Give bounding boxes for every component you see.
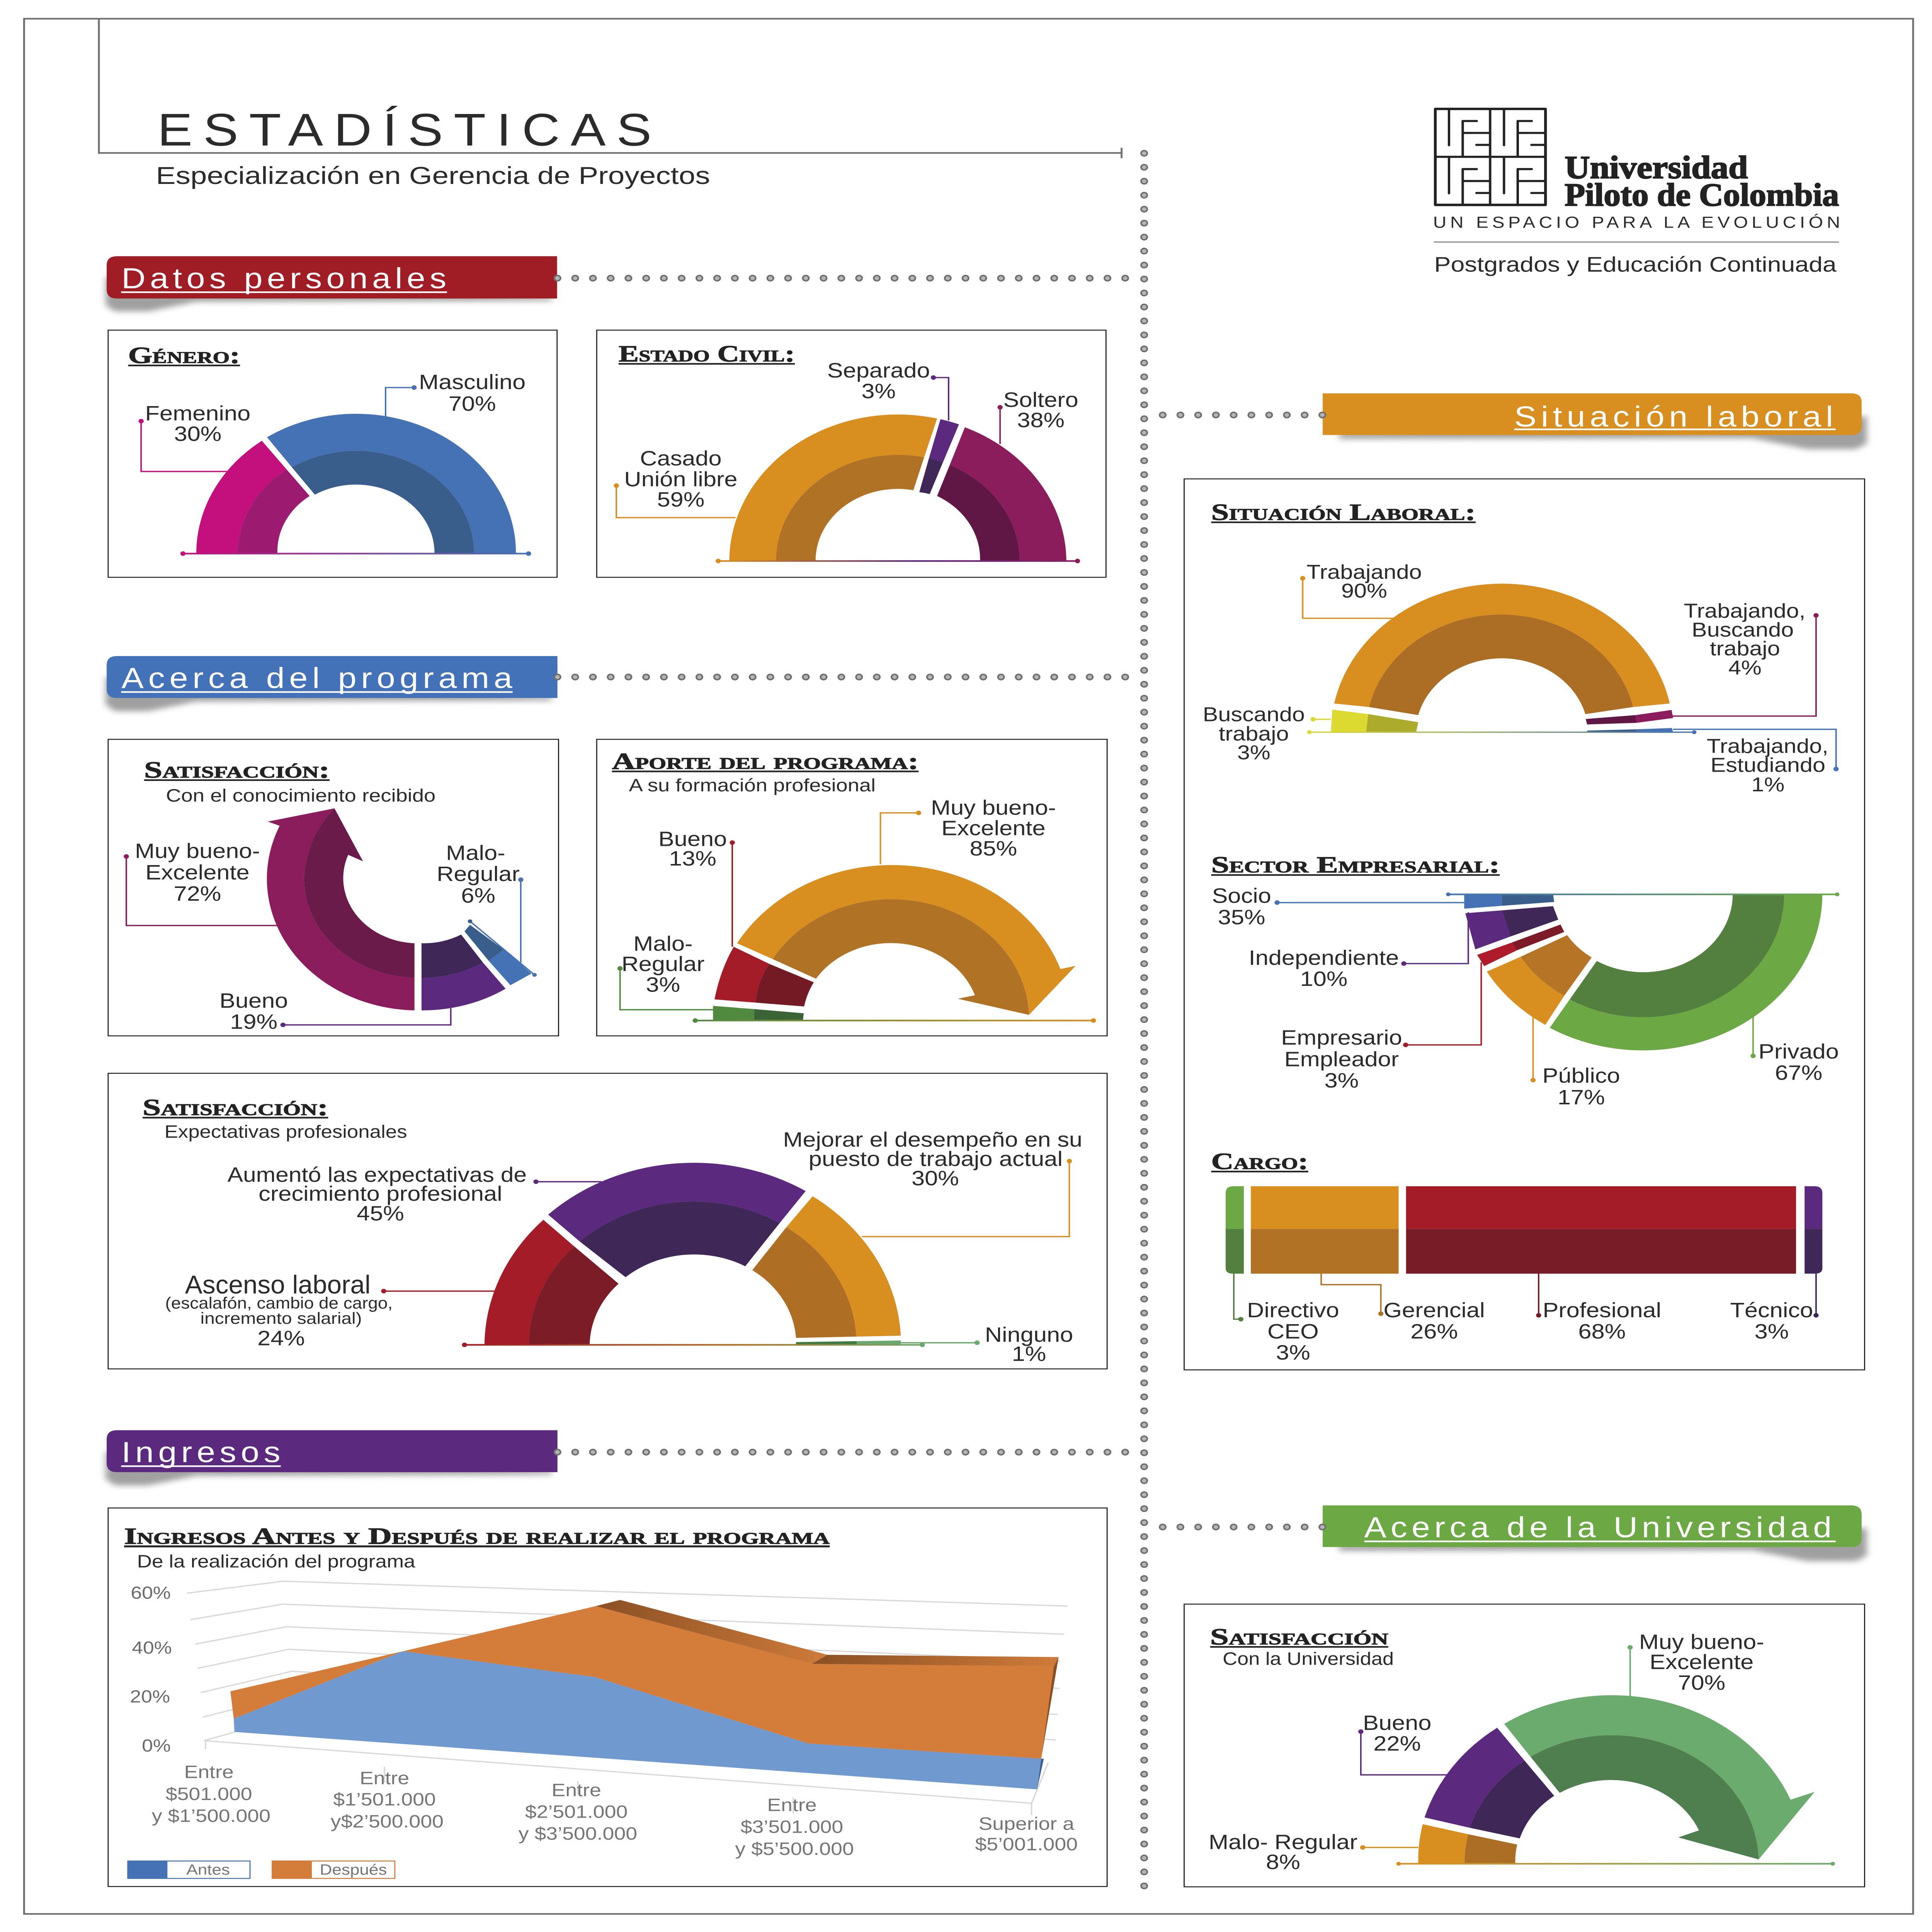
section header: Situación laboral [1163,393,1867,449]
panel: ingresos [108,1508,1107,1886]
section header: Ingresos [105,1430,1128,1485]
label: malo regular [437,842,537,977]
logo department: Postgrados y Educación Continuada [1434,252,1837,276]
x axis label 3: Entre [551,1780,601,1800]
section header: Acerca de la Universidad: Acerca de la Universidad [1364,1512,1832,1544]
legend: antes: Antes [186,1861,230,1878]
heading: situacion laboral: Situación Laboral: [1211,499,1476,525]
label: soltero: Soltero [1003,389,1078,412]
label: masculino: 70% [449,393,496,415]
label: socio: Socio [1212,884,1271,908]
label: trabajando: Trabajando [1306,561,1422,583]
label: ascenso laboral [165,1270,495,1350]
panel: genero [108,330,557,577]
panel: aporte del programa [597,739,1107,1036]
x axis label 2 [331,1768,444,1832]
label: separado: Separado [827,359,930,382]
label: ascenso laboral: 24% [257,1327,305,1350]
label: casado [614,447,737,518]
panel: satisfaccion expectativas [108,1073,1107,1369]
subheading: expectativas: Expectativas profesionales [165,1122,407,1142]
label: casado: Unión libre [624,468,737,491]
y axis labels: 20% [130,1687,170,1706]
donut chart: estado civil [716,415,1080,563]
label: empresario empleador: Empleador [1284,1048,1399,1071]
label: casado: Casado [640,447,722,470]
heading: aporte: Aporte del programa: [612,748,918,774]
label: socio: 35% [1218,906,1265,929]
label: empresario empleador: 3% [1325,1069,1359,1092]
panel: satisfaccion universidad [1184,1604,1865,1887]
logo wordmark line 2: Piloto de Colombia [1565,177,1839,213]
label: ascenso laboral: (escalafón, cambio de cargo, [165,1294,393,1312]
label: directivo: 3% [1276,1341,1310,1364]
label: mejorar desempeno: Mejorar el desempeño en su [783,1128,1082,1151]
donut chart: expectativas [462,1163,925,1347]
label: directivo: CEO [1267,1320,1319,1343]
label: trabajando buscando trabajo: 4% [1728,656,1762,679]
x axis label 4: y $5’500.000 [735,1838,854,1859]
x axis label 3: $2’501.000 [525,1801,628,1822]
label: masculino [386,371,526,417]
label: directivo [1234,1274,1339,1364]
x axis label 4: Entre [767,1794,817,1815]
x axis label 4: $3’501.000 [741,1816,843,1837]
label: buscando trabajo: 3% [1237,742,1270,764]
x axis label 2: y$2’500.000 [331,1811,444,1832]
label: malo regular: 3% [646,973,680,996]
title: ESTADÍSTICAS [157,104,651,156]
label: bueno: 19% [230,1010,277,1034]
section header: Datos personales [105,256,1128,311]
label: separado: 3% [861,380,896,403]
label: tecnico: 3% [1755,1320,1789,1343]
label: ascenso laboral: Ascenso laboral [185,1270,371,1299]
label: femenino [139,402,250,471]
label: malo regular: Regular [621,953,704,976]
section header: Datos personales: Datos personales [121,262,446,295]
label: privado [1750,1017,1839,1084]
subheading: ingresos: De la realización del programa [137,1551,415,1571]
subheading: conocimiento: Con el conocimiento recibido [166,786,435,806]
label: bueno: Bueno [219,990,288,1012]
arrow donut chart: universidad [1396,1695,1835,1866]
label: bueno: 13% [669,847,716,870]
legend: despues [272,1861,395,1879]
x axis label 3: y $3’500.000 [519,1823,637,1844]
label: publico: 17% [1558,1086,1605,1109]
logo wordmark: Universidad [1565,150,1748,185]
label: aumento expectativas: 45% [357,1202,404,1225]
label: mejorar desempeno: puesto de trabajo actual [809,1148,1063,1170]
label: trabajando buscando trabajo: Trabajando, [1684,600,1805,622]
label: malo regular [1209,1831,1418,1874]
label: casado: 59% [657,488,704,511]
3D area chart [187,1581,1068,1815]
label: malo regular [617,932,713,1010]
label: muy bueno [1628,1631,1764,1696]
label: soltero: 38% [1017,409,1065,432]
label: malo regular: Regular [437,863,520,886]
panel: satisfaccion conocimiento [108,739,559,1036]
label: aumento expectativas [228,1163,602,1225]
panel: estado civil [597,330,1106,577]
subtitle: Especialización en Gerencia de Proyectos [156,162,710,189]
label: trabajando estudiando: 1% [1751,773,1784,796]
heading: satisfaccion: Satisfacción: [143,1094,328,1120]
logo [1433,109,1840,276]
x axis label 5 [975,1813,1078,1854]
subheading: aporte: A su formación profesional [629,776,876,795]
x axis label 2: $1’501.000 [333,1789,436,1810]
donut chart: genero [180,414,531,556]
heading: ingresos: Ingresos Antes y Después de realizar el programa [124,1523,830,1549]
label: muy bueno [881,796,1056,864]
donut chart: situacion laboral [1307,584,1696,734]
arrow donut chart: conocimiento [267,808,532,1010]
label: tecnico [1730,1274,1819,1343]
label: empresario empleador: Empresario [1281,1026,1402,1049]
label: femenino: 30% [174,422,221,446]
label: independiente [1249,912,1468,990]
y axis labels [130,1583,172,1755]
label: trabajando estudiando: Estudiando [1711,754,1825,776]
x axis label 1: $501.000 [166,1784,252,1804]
y axis labels: 60% [131,1583,171,1603]
label: buscando trabajo: Buscando [1203,703,1305,726]
label: gerencial: Gerencial [1383,1299,1485,1322]
label: trabajando: 90% [1341,580,1387,602]
label: empresario empleador [1281,962,1481,1092]
donut chart: sector empresarial [1446,893,1839,1050]
x axis label 3 [519,1780,637,1844]
stacked bar: cargo [1226,1186,1822,1274]
heading: satisfaccion: Satisfacción [1210,1624,1388,1650]
label: aumento expectativas: Aumentó las expectativas de [228,1163,527,1186]
label: ascenso laboral: incremento salarial) [201,1309,362,1327]
section header: Acerca de la Universidad [1163,1505,1867,1561]
label: muy bueno: Excelente [941,817,1046,840]
label: trabajando buscando trabajo: Buscando [1692,619,1794,641]
label: muy bueno [124,840,277,925]
label: profesional [1536,1274,1661,1343]
label: ninguno: 1% [1012,1342,1046,1366]
x axis label 5: Superior a [978,1813,1074,1833]
label: trabajando [1300,561,1422,618]
label: masculino: Masculino [419,371,526,394]
label: publico [1531,1017,1620,1109]
label: mejorar desempeno: 30% [912,1167,959,1190]
x axis label 5: $5’001.000 [975,1834,1078,1854]
x axis label 1: y $1’500.000 [152,1805,270,1826]
y axis labels: 0% [142,1736,171,1755]
label: malo regular: 6% [461,884,495,907]
label: gerencial: 26% [1410,1320,1458,1343]
label: soltero [997,389,1078,444]
vertical dotted divider [1140,153,1148,1891]
x axis label 1: Entre [184,1762,234,1782]
label: buscando trabajo [1203,703,1331,764]
label: directivo: Directivo [1247,1299,1339,1322]
label: trabajando buscando trabajo: trabajo [1710,638,1780,660]
title bracket [99,19,1122,158]
label: bueno: 22% [1373,1732,1421,1755]
subheading: universidad: Con la Universidad [1223,1649,1394,1669]
label: bueno: Bueno [1363,1712,1431,1735]
section header: Situación laboral: Situación laboral [1514,401,1833,433]
label: femenino: Femenino [145,402,250,425]
label: malo regular: Malo- [446,842,505,865]
label: trabajando estudiando [1673,729,1838,796]
label: profesional: Profesional [1543,1299,1661,1322]
label: ninguno: Ninguno [985,1323,1073,1347]
logo mark: maze square [1435,109,1546,205]
label: trabajando buscando trabajo [1672,600,1819,716]
label: independiente: 10% [1300,968,1347,990]
label: gerencial [1321,1274,1485,1343]
label: muy bueno: Muy bueno- [1639,1631,1764,1654]
label: muy bueno: Excelente [1650,1651,1753,1673]
label: muy bueno: Excelente [145,861,250,884]
label: malo regular: Malo- Regular [1209,1831,1357,1854]
section header: Acerca del programa [105,656,1128,711]
section header: Ingresos: Ingresos [121,1436,281,1469]
label: profesional: 68% [1578,1320,1626,1343]
label: separado [827,359,949,420]
label: ninguno [901,1323,1073,1366]
x axis label 4 [735,1794,854,1859]
label: muy bueno: Muy bueno- [135,840,260,863]
x axis label 2: Entre [360,1768,409,1788]
label: muy bueno: Muy bueno- [931,796,1056,820]
label: privado: Privado [1759,1040,1839,1063]
heading: sector empresarial: Sector Empresarial: [1211,852,1500,878]
legend: despues: Después [320,1861,387,1878]
heading: genero: Género: [128,342,240,368]
label: independiente: Independiente [1249,947,1399,969]
label: trabajando estudiando: Trabajando, [1707,735,1828,757]
label: bueno: Bueno [658,828,727,851]
heading: satisfaccion: Satisfacción: [144,757,330,783]
label: tecnico: Técnico [1730,1299,1813,1322]
label: privado: 67% [1775,1061,1822,1084]
label: aumento expectativas: crecimiento profesional [259,1182,502,1206]
section header: Acerca del programa: Acerca del programa [121,662,512,694]
heading: estado civil: Estado Civil: [619,340,795,366]
label: muy bueno: 72% [174,883,221,905]
logo tagline: UN ESPACIO PARA LA EVOLUCIÓN [1433,213,1840,231]
label: muy bueno: 85% [970,837,1017,860]
y axis labels: 40% [132,1638,172,1657]
heading: cargo: Cargo: [1211,1148,1308,1174]
legend: antes [128,1861,250,1879]
arrow donut chart: aporte [693,865,1096,1023]
label: buscando trabajo: trabajo [1219,723,1289,745]
label: mejorar desempeno [783,1128,1082,1236]
label: socio [1212,884,1464,929]
label: muy bueno: 70% [1678,1671,1725,1694]
label: bueno [658,828,735,947]
label: publico: Público [1543,1065,1620,1087]
label: bueno [1358,1712,1447,1775]
x axis label 1 [152,1762,270,1826]
label: malo regular: Malo- [633,932,693,955]
panel: situacion, sector, cargo [1184,479,1865,1370]
label: malo regular: 8% [1266,1851,1300,1874]
label: bueno [219,990,451,1034]
